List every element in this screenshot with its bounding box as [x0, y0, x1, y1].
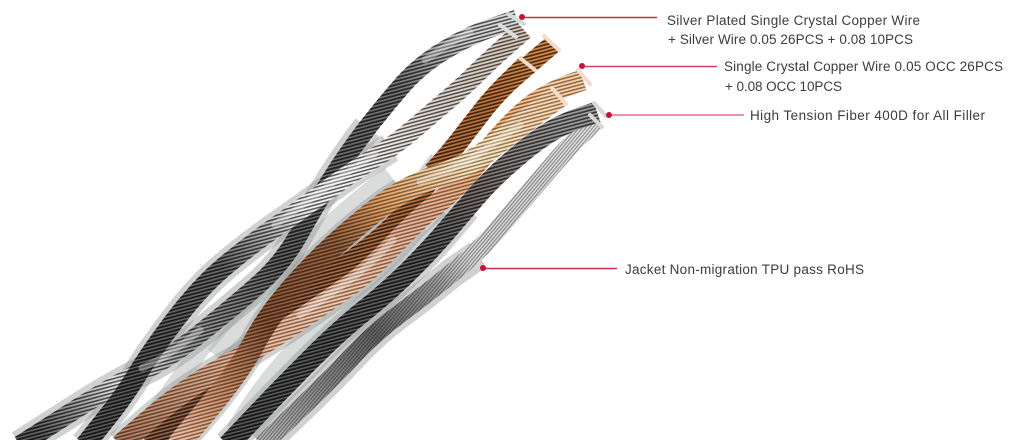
callout: silver plated wire: [519, 13, 920, 47]
callout: high tension fiber: High Tension Fiber 400D for All Filler: [750, 108, 986, 123]
callout: jacket: Jacket Non-migration TPU pass RoHS: [625, 262, 864, 277]
strand: dark silver, upper: [20, 19, 517, 440]
translucent TPU jackets: [20, 128, 478, 440]
strand: copper, light lower: [120, 80, 583, 440]
callout: single crystal copper wire: + 0.08 OCC 10PCS: [725, 79, 842, 94]
strand: copper, dark twisted tip: [433, 63, 528, 172]
strand: copper, dark mesh: [150, 45, 552, 440]
strand: grey fiber lower: [262, 120, 597, 440]
callout: silver plated wire: Silver Plated Single Crystal Copper Wire: [667, 13, 920, 28]
callout: high tension fiber: [606, 108, 986, 123]
cable illustration: [20, 14, 606, 440]
strand: copper, bright twisted: [178, 97, 558, 440]
callout: single crystal copper wire: Single Crystal Copper Wire 0.05 OCC 26PCS: [724, 59, 1003, 74]
end caps of the conductors: [500, 14, 606, 127]
strand: silver plated mesh: [85, 30, 524, 440]
callout: silver plated wire: + Silver Wire 0.05 26PCS + 0.08 10PCS: [668, 32, 913, 47]
callout: jacket: [480, 262, 864, 277]
metallic highlights: [142, 32, 520, 368]
callout: single crystal copper wire: [579, 59, 1003, 94]
filler jackets between the strands: [150, 175, 420, 430]
strand: black: [228, 112, 597, 440]
